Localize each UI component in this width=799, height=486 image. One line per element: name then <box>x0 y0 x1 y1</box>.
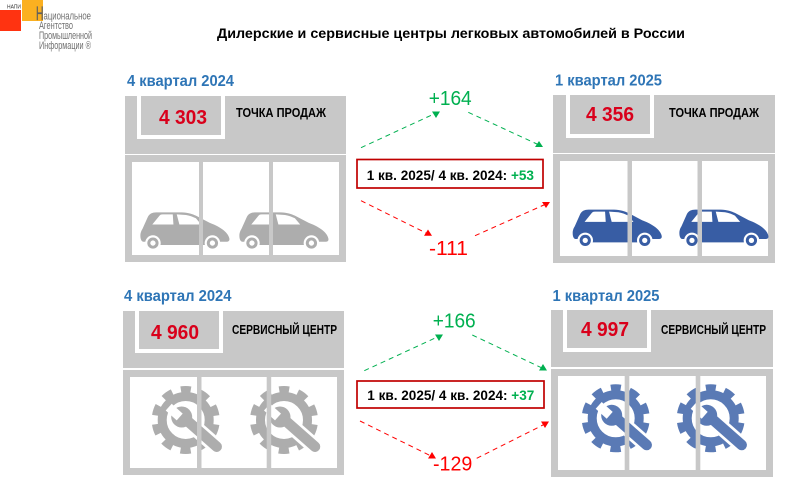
quarter heading: 1 квартал 2025 <box>552 288 660 305</box>
logo: Промышленной <box>39 30 92 42</box>
header block <box>123 311 344 368</box>
change flow: service centres <box>357 310 549 476</box>
logo: Н <box>36 4 44 25</box>
quarter heading: 1 квартал 2025 <box>555 72 662 90</box>
panel: sales points Q1 2025 <box>553 72 775 263</box>
comparison box <box>357 381 544 408</box>
change flow: sales points <box>357 87 550 260</box>
header block: ТОЧКА ПРОДАЖ <box>236 106 327 120</box>
arrow: green up <box>364 334 443 371</box>
workshop with grey gear icons <box>123 370 344 475</box>
header block: 4 997 <box>581 319 629 341</box>
comparison box <box>357 160 543 188</box>
arrow: red up <box>475 202 550 236</box>
panel: service centres Q1 2025 <box>551 288 773 477</box>
arrow: green down <box>468 112 543 147</box>
header block: СЕРВИСНЫЙ ЦЕНТР <box>232 322 337 337</box>
header block <box>551 310 773 367</box>
header block <box>553 95 775 153</box>
logo: Агентство <box>39 20 73 32</box>
arrow: red down <box>361 201 432 236</box>
arrow: red down <box>360 421 436 458</box>
arrow: red up <box>477 422 549 458</box>
arrow: green up <box>361 112 440 148</box>
showroom with blue cars <box>553 154 775 263</box>
closed count: -111 <box>429 237 468 260</box>
logo: НАПИ <box>7 4 21 10</box>
header block: ТОЧКА ПРОДАЖ <box>669 106 760 120</box>
panel: sales points Q4 2024 <box>125 73 346 262</box>
comparison box: 1 кв. 2025/ 4 кв. 2024: +37 <box>367 387 535 403</box>
opened count: +166 <box>433 310 476 333</box>
arrow: green down <box>472 335 547 370</box>
panel: service centres Q4 2024 <box>123 288 344 475</box>
header block: СЕРВИСНЫЙ ЦЕНТР <box>661 322 766 337</box>
comparison box: 1 кв. 2025/ 4 кв. 2024: +53 <box>367 167 534 183</box>
closed count: -129 <box>433 453 472 476</box>
logo <box>0 0 92 52</box>
logo: Информации ® <box>39 40 91 52</box>
header block <box>125 96 346 154</box>
quarter heading: 4 квартал 2024 <box>124 288 232 305</box>
opened count: +164 <box>429 87 472 110</box>
logo: ациональное <box>44 10 91 22</box>
title: Дилерские и сервисные центры легковых автомобилей в России <box>217 26 685 41</box>
workshop with blue gear icons <box>551 369 773 477</box>
header block: 4 960 <box>151 322 199 344</box>
header block: 4 303 <box>159 107 207 129</box>
header block: 4 356 <box>586 104 634 126</box>
showroom with grey cars <box>125 155 346 262</box>
quarter heading: 4 квартал 2024 <box>127 73 234 90</box>
